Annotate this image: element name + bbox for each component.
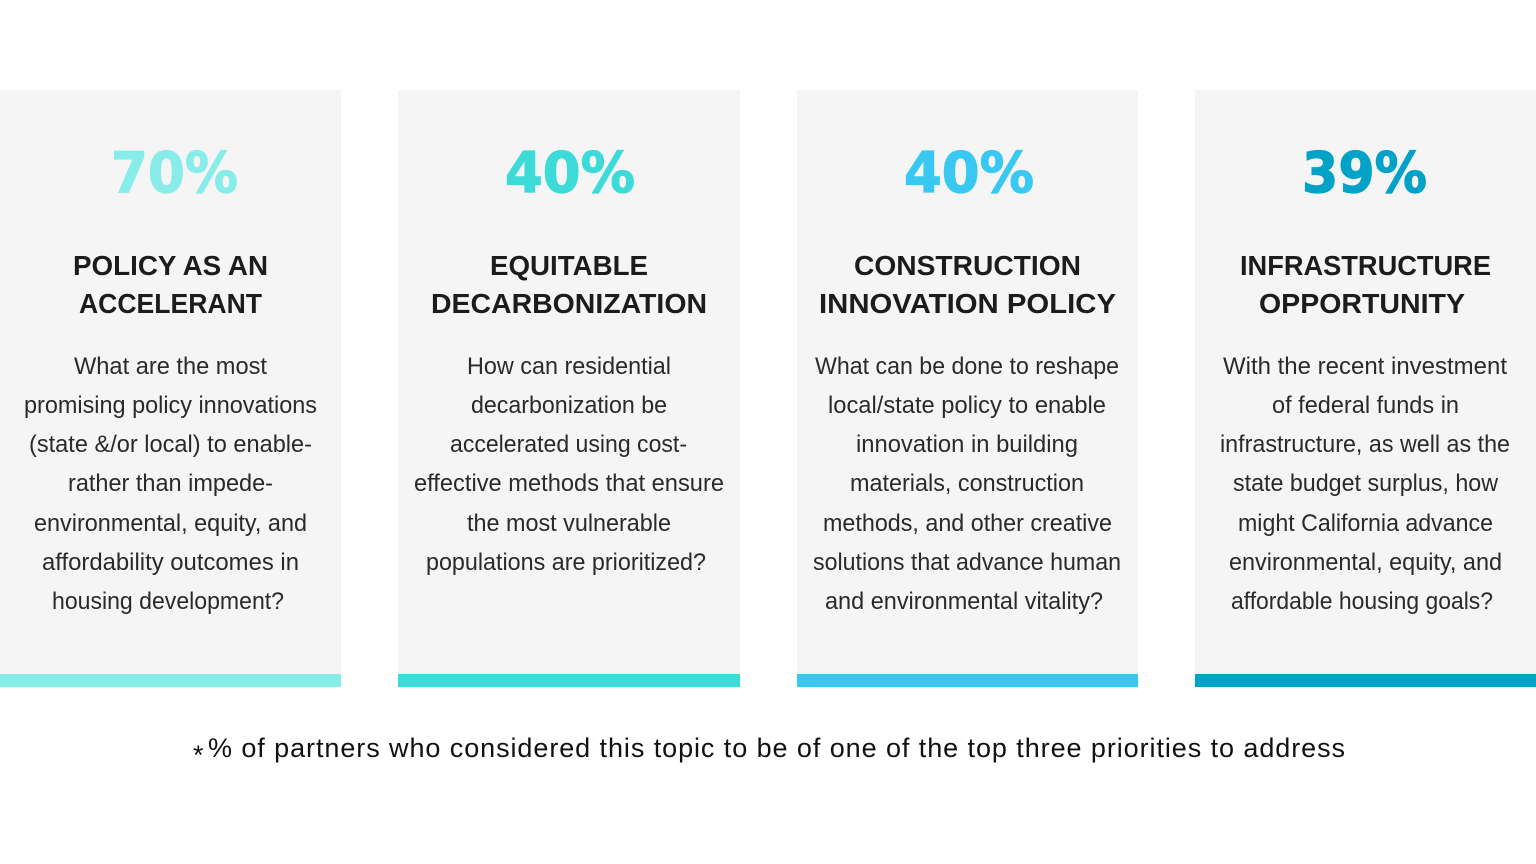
footnote: % of partners who considered this topic to be of one of the top three priorities to address — [208, 733, 1345, 763]
card background — [1195, 90, 1536, 687]
body text: innovation in building — [856, 431, 1078, 458]
body text: (state &/or local) to enable- — [29, 431, 312, 458]
body text: infrastructure, as well as the — [1220, 431, 1510, 458]
percentage: 39%: 39% — [1302, 141, 1427, 206]
heading: INFRASTRUCTURE — [1240, 250, 1491, 281]
body text: housing development? — [52, 588, 284, 615]
accent bar — [398, 674, 740, 687]
body text: How can residential — [467, 353, 671, 380]
panel: equitable decarbonization — [398, 90, 740, 687]
percentage: 40%: 40% — [904, 141, 1034, 206]
card background — [797, 90, 1138, 687]
body text: might California advance — [1238, 510, 1493, 537]
body text: With the recent investment — [1223, 353, 1507, 380]
body text: methods, and other creative — [823, 510, 1112, 537]
body text — [1220, 353, 1510, 615]
body text: materials, construction — [850, 470, 1084, 497]
heading: ACCELERANT — [79, 288, 262, 319]
heading — [73, 250, 268, 319]
heading — [819, 250, 1116, 319]
card background — [398, 90, 740, 687]
heading: POLICY AS AN — [73, 250, 268, 281]
body text: the most vulnerable — [467, 510, 671, 537]
heading — [431, 250, 707, 319]
body text: environmental, equity, and — [34, 510, 307, 537]
body text — [414, 353, 724, 576]
panel: policy as an accelerant — [0, 90, 341, 687]
accent bar — [797, 674, 1138, 687]
heading: INNOVATION POLICY — [819, 288, 1116, 319]
body text: rather than impede- — [68, 470, 273, 497]
percentage: 70%: 70% — [111, 141, 238, 206]
body text: solutions that advance human — [813, 549, 1121, 576]
percentage: 40%: 40% — [505, 141, 635, 206]
heading: DECARBONIZATION — [431, 288, 707, 319]
body text: affordability outcomes in — [42, 549, 299, 576]
body text: promising policy innovations — [24, 392, 317, 419]
body text: decarbonization be — [471, 392, 667, 419]
body text — [24, 353, 317, 615]
heading: EQUITABLE — [490, 250, 648, 281]
body text: accelerated using cost- — [450, 431, 687, 458]
heading: OPPORTUNITY — [1259, 288, 1465, 319]
panel: infrastructure opportunity — [1195, 90, 1536, 687]
body text: of federal funds in — [1272, 392, 1459, 419]
panel: construction innovation policy — [797, 90, 1138, 687]
heading — [1240, 250, 1491, 319]
heading: CONSTRUCTION — [854, 250, 1081, 281]
body text: local/state policy to enable — [828, 392, 1106, 419]
accent bar — [0, 674, 341, 687]
body text: environmental, equity, and — [1229, 549, 1502, 576]
accent bar — [1195, 674, 1536, 687]
card background — [0, 90, 341, 687]
body text: What can be done to reshape — [815, 353, 1119, 380]
body text: populations are prioritized? — [426, 549, 706, 576]
body text: state budget surplus, how — [1233, 470, 1499, 497]
body text: affordable housing goals? — [1231, 588, 1493, 615]
body text: effective methods that ensure — [414, 470, 724, 497]
body text: and environmental vitality? — [825, 588, 1103, 615]
body text — [813, 353, 1121, 615]
footnote: * — [193, 740, 204, 770]
body text: What are the most — [74, 353, 267, 380]
